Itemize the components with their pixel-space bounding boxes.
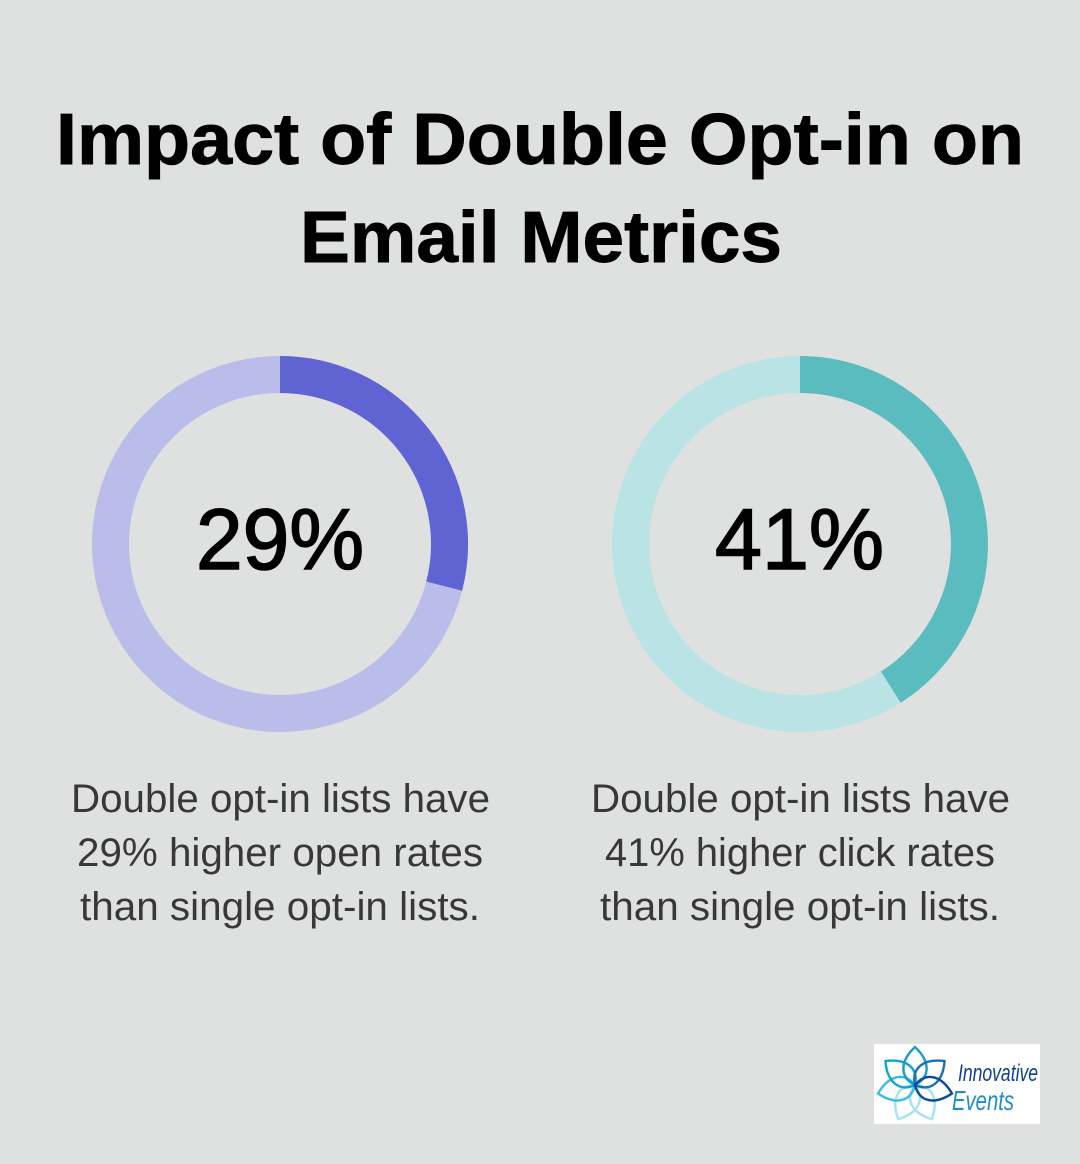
logo wordmark bbox=[952, 1060, 1038, 1116]
logo wordmark: Innovative bbox=[958, 1060, 1038, 1087]
logo: Innovative Events bbox=[874, 1044, 1040, 1124]
description: click rates: than single opt-in lists. bbox=[600, 885, 1000, 929]
description: open rates: Double opt-in lists have bbox=[71, 777, 490, 821]
description: click rates bbox=[591, 777, 1010, 929]
description: click rates: Double opt-in lists have bbox=[591, 777, 1010, 821]
value: 41%: 41% bbox=[715, 492, 884, 588]
panel: click rates bbox=[591, 374, 1010, 929]
panel: open rates bbox=[71, 374, 490, 929]
description: open rates: than single opt-in lists. bbox=[80, 885, 480, 929]
description: open rates: 29% higher open rates bbox=[77, 831, 483, 875]
logo wordmark: Events bbox=[952, 1085, 1014, 1116]
title: Impact of Double Opt-in on bbox=[56, 100, 1024, 180]
title bbox=[56, 100, 1024, 278]
title: Email Metrics bbox=[300, 198, 782, 278]
description: open rates bbox=[71, 777, 490, 929]
icon: flower bbox=[875, 1047, 955, 1124]
donut chart: 29% bbox=[110, 374, 450, 714]
donut chart: 41% bbox=[630, 374, 970, 714]
value: 29%: 29% bbox=[196, 492, 364, 588]
description: click rates: 41% higher click rates bbox=[605, 831, 995, 875]
